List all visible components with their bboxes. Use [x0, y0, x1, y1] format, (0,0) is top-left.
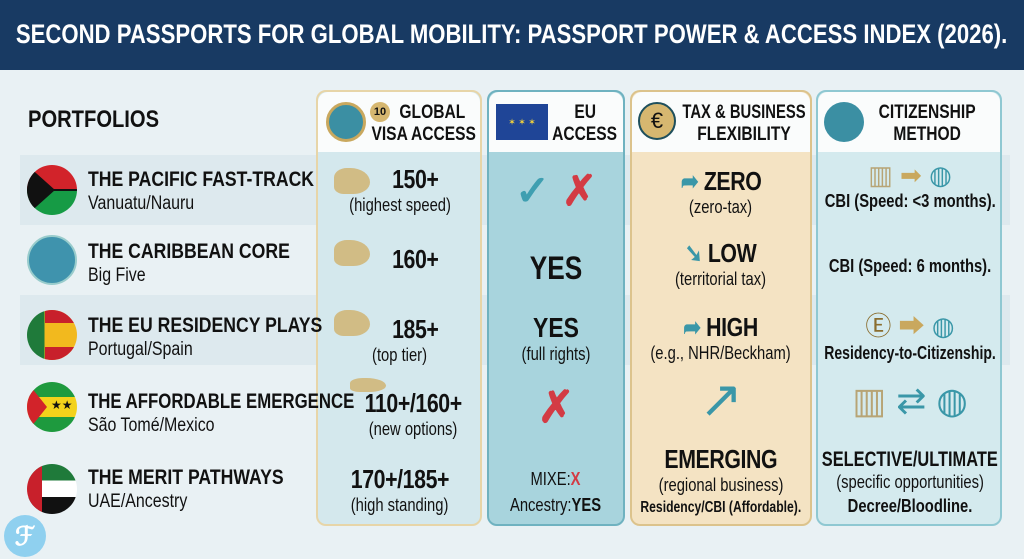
column: global visa access [316, 90, 482, 526]
title banner: SECOND PASSPORTS FOR GLOBAL MOBILITY: PASSPORT POWER & ACCESS INDEX (2026). [16, 19, 1008, 49]
row 3: EU residency: (e.g., NHR/Beckham) [651, 343, 791, 363]
row 4: affordable: 110+/160+ [364, 388, 462, 418]
icon: EU flag: ✶ ✶ ✶ [508, 117, 536, 127]
row 2: caribbean: 160+ [392, 244, 438, 274]
row 1: pacific: ✓ ✗ [515, 167, 597, 214]
row 3: EU residency: THE EU RESIDENCY PLAYS [88, 314, 322, 337]
icon: euro coin: € [651, 108, 663, 133]
row 2: caribbean [27, 235, 991, 289]
row 5: merit: (high standing) [351, 495, 449, 515]
column: tax: TAX & BUSINESS [682, 102, 806, 123]
row 5: merit: EMERGING [665, 444, 777, 474]
row 5: merit: UAE/Ancestry [88, 491, 187, 512]
row 3: EU residency: YES [533, 312, 579, 343]
row backgrounds [20, 155, 1010, 365]
row 3: EU residency: (top tier) [373, 345, 427, 365]
column: citizenship: CITIZENSHIP [879, 102, 975, 123]
row 2: caribbean: ➘ LOW [685, 238, 757, 268]
row 2: caribbean: CBI (Speed: 6 months). [829, 256, 991, 276]
row 3: EU residency: Residency-to-Citizenship. [824, 343, 996, 363]
row 4: affordable: São Tomé/Mexico [88, 415, 215, 436]
row 1: pacific: ▥ ➡ ◍ [868, 160, 952, 190]
row 1: pacific [27, 160, 995, 217]
title banner [0, 0, 1024, 70]
row 3: EU residency: Portugal/Spain [88, 339, 193, 360]
column: global visa access: 10 [374, 106, 386, 118]
row 4: affordable: (new options) [369, 419, 457, 439]
icon: euro coin [638, 102, 676, 140]
row 4: affordable: THE AFFORDABLE EMERGENCE [88, 390, 354, 413]
row 3: EU residency: 185+ [392, 314, 438, 344]
row 5: merit: 170+/185+ [351, 464, 449, 494]
row 2: caribbean: YES [530, 250, 582, 286]
row 1: pacific: CBI (Speed: <3 months). [825, 191, 995, 211]
row 2: caribbean: Big Five [88, 265, 146, 286]
column: global visa access: VISA ACCESS [372, 124, 476, 145]
row 4: affordable [27, 371, 968, 439]
heading: portfolios: PORTFOLIOS [28, 106, 159, 133]
column: EU access [487, 90, 625, 526]
logo badge: ℱ [15, 521, 35, 551]
row 1: pacific: ➦ ZERO [681, 166, 761, 196]
logo badge [4, 515, 46, 557]
row 3: EU residency: ➦ HIGH [684, 312, 758, 342]
row 4: affordable: ✗ [538, 383, 574, 432]
row 1: pacific: THE PACIFIC FAST-TRACK [88, 168, 314, 191]
row 2: caribbean: (territorial tax) [675, 269, 767, 289]
icon: globe [326, 102, 366, 142]
row 5: merit: SELECTIVE/ULTIMATE [822, 448, 998, 471]
row 5: merit: Decree/Bloodline. [848, 496, 972, 516]
row 2: caribbean: THE CARIBBEAN CORE [88, 240, 290, 263]
row 5: merit [27, 444, 998, 516]
flag: sao tome: ★★ [51, 398, 73, 412]
flag: portugal/spain [27, 310, 77, 360]
row 1: pacific: Vanuatu/Nauru [88, 193, 194, 214]
row 1: pacific: (highest speed) [349, 195, 451, 215]
row 5: merit: THE MERIT PATHWAYS [88, 466, 284, 489]
row 4: affordable: ↗ [699, 371, 743, 429]
column: global visa access: GLOBAL [400, 102, 466, 123]
row 1: pacific: 150+ [392, 164, 438, 194]
row 4: affordable: ▥ ⇄ ◍ [852, 380, 968, 421]
column: EU access: ACCESS [553, 124, 617, 145]
map shapes [4, 168, 386, 544]
icon: EU flag [496, 104, 548, 140]
row 3: EU residency [27, 310, 996, 365]
row 3: EU residency: (full rights) [522, 344, 590, 364]
row 5: merit: (specific opportunities) [836, 472, 984, 492]
row 5: merit: (regional business) [659, 475, 783, 495]
row 5: merit: MIXE:X [531, 469, 581, 489]
column: citizenship: METHOD [893, 124, 961, 145]
row 1: pacific: (zero-tax) [689, 197, 753, 217]
icon: citizenship [824, 102, 864, 142]
column: EU access: EU [574, 102, 596, 123]
flag: vanuatu [27, 165, 77, 215]
row 5: merit: Residency/CBI (Affordable). [641, 499, 801, 516]
column: citizenship [816, 90, 1002, 526]
column: tax [630, 90, 812, 526]
flag: globe [27, 235, 77, 285]
column: tax: FLEXIBILITY [697, 124, 791, 145]
row 5: merit: Ancestry:YES [510, 495, 602, 515]
row 3: EU residency: Ⓔ ➡ ◍ [865, 311, 955, 341]
flag: UAE [27, 464, 77, 514]
flag: sao tome [27, 382, 77, 432]
